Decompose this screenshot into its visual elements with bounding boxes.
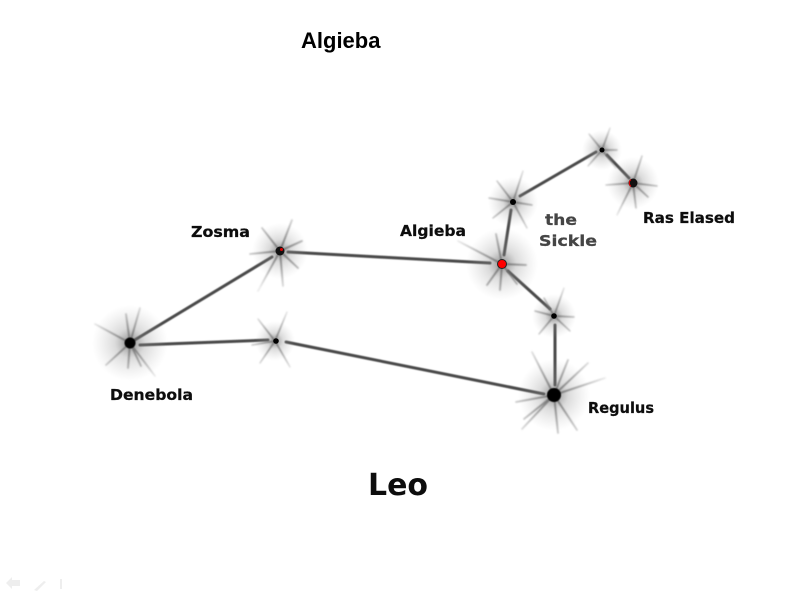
star: middle back — [251, 312, 292, 368]
star: Zosma — [248, 219, 304, 292]
star: Denebola — [94, 307, 162, 376]
label: Regulus: Regulus — [588, 399, 654, 417]
label: Leo: Leo — [368, 468, 428, 503]
label: Ras Elased: Ras Elased — [643, 209, 735, 227]
star: Algieba — [458, 232, 532, 294]
label: the Sickle: Sickle — [539, 232, 597, 250]
star: Ras Elased — [605, 155, 658, 216]
constellation lines — [133, 152, 629, 394]
label: the Sickle — [539, 211, 597, 250]
star: Regulus — [514, 351, 606, 434]
star: Sickle lower — [534, 288, 576, 335]
icons: faint slide controls — [6, 577, 62, 591]
label: the Sickle: the — [545, 211, 577, 229]
star: top of Sickle — [586, 128, 619, 169]
label: Zosma: Zosma — [191, 223, 250, 241]
title: Algieba — [301, 28, 381, 53]
star: Sickle upper — [488, 170, 534, 229]
label: Algieba: Algieba — [400, 222, 466, 240]
label: Denebola: Denebola — [110, 386, 193, 404]
